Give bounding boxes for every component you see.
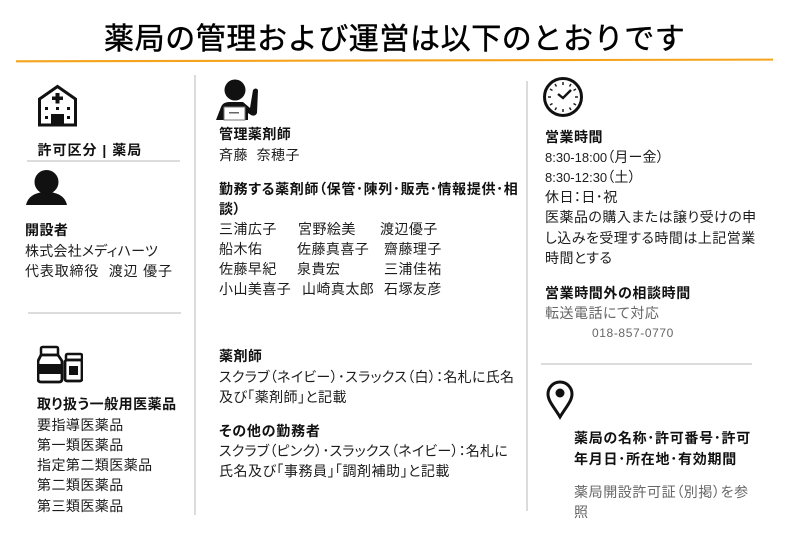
list: staff names: 泉貴宏 [297, 261, 340, 277]
text: license reference: 薬局開設許可証（別掲）を参 [574, 484, 749, 500]
panel: middle column [216, 80, 518, 479]
icon: pharmacist [216, 80, 258, 120]
title underline [16, 58, 773, 62]
heading: staff pharmacists: 勤務する薬剤師（保管･陳列･販売･情報提供･相 [219, 181, 518, 197]
text: license reference: 照 [574, 504, 588, 520]
title: 薬局の管理および運営は以下のとおりです [104, 23, 685, 56]
heading: license info: 年月日･所在地･有効期間 [574, 451, 737, 467]
heading: license info [574, 430, 751, 467]
heading: founder: 開設者 [25, 222, 68, 238]
list: staff names: 山崎真太郎 [302, 281, 374, 297]
icon: location pin [546, 380, 574, 420]
list: medicine classes: 第三類医薬品 [37, 498, 124, 514]
list: staff names: 佐藤真喜子 [297, 241, 369, 257]
text: after hours: 転送電話にて対応 [545, 305, 659, 321]
list: medicine classes: 第一類医薬品 [37, 437, 124, 453]
text: phone number: 018-857-0770 [592, 326, 674, 340]
text: other staff uniform: スクラブ（ピンク）･スラックス（ネイビー）：名札に [219, 443, 508, 459]
list: medicine classes: 第二類医薬品 [37, 477, 124, 493]
heading: supervising pharmacist: 管理薬剤師 [219, 126, 291, 142]
heading: other staff: その他の勤務者 [219, 423, 321, 439]
text: pharmacist uniform: 及び｢薬剤師｣と記載 [219, 389, 347, 405]
list: staff names: 小山美喜子 [219, 281, 291, 297]
heading: license: 許可区分 | 薬局 [38, 142, 142, 158]
text: business hours: 8:30-18:00（月ー金） [545, 149, 664, 165]
text: business hours: 医薬品の購入または譲り受けの申 [545, 209, 757, 225]
icon: clock [543, 77, 583, 117]
heading: pharmacist uniform: 薬剤師 [219, 348, 262, 364]
list: staff names: 船木佑 [219, 241, 262, 257]
heading: after hours: 営業時間外の相談時間 [545, 285, 691, 301]
text: pharmacist uniform [219, 369, 514, 405]
text: supervisor name: 斉藤 奈穂子 [219, 147, 300, 163]
list: staff names: 石塚友彦 [384, 281, 442, 297]
text: company: 株式会社メディハーツ [25, 243, 158, 259]
text: license reference [574, 484, 749, 520]
text: business hours: 時間とする [545, 250, 612, 266]
text: representative: 代表取締役 渡辺 優子 [25, 263, 173, 279]
icon: person [26, 170, 67, 205]
list: medicine classes: 指定第二類医薬品 [37, 457, 153, 473]
heading: business hours: 営業時間 [545, 129, 603, 145]
icon: medicine bottles [37, 346, 83, 384]
icon: hospital [38, 84, 77, 126]
list: staff names: 宮野絵美 [298, 221, 356, 237]
list: medicine classes: 要指導医薬品 [37, 417, 124, 433]
panel: left column [25, 84, 177, 514]
list: staff names: 齋藤理子 [384, 241, 442, 257]
list: staff names [219, 221, 442, 297]
text: business hours: し込みを受理する時間は上記営業 [545, 230, 756, 246]
text: business hours: 休日：日･祝 [545, 189, 618, 205]
text: other staff uniform [219, 443, 508, 479]
heading: medicines handled: 取り扱う一般用医薬品 [37, 396, 177, 412]
text: business hours [545, 149, 757, 266]
list: staff names: 三浦佳祐 [384, 261, 442, 277]
heading: license info: 薬局の名称･許可番号･許可 [574, 430, 751, 446]
list: staff names: 渡辺優子 [380, 221, 438, 237]
panel: right column [543, 77, 757, 520]
panel: middle column: 談） [219, 201, 241, 217]
list: staff names: 佐藤早紀 [219, 261, 277, 277]
text: other staff uniform: 氏名及び｢事務員｣｢調剤補助｣と記載 [219, 463, 450, 479]
list: medicine classes [37, 417, 153, 514]
text: business hours: 8:30-12:30（土） [545, 169, 636, 185]
list: staff names: 三浦広子 [219, 221, 277, 237]
text: pharmacist uniform: スクラブ（ネイビー）･スラックス（白）：名札に氏名 [219, 369, 514, 385]
